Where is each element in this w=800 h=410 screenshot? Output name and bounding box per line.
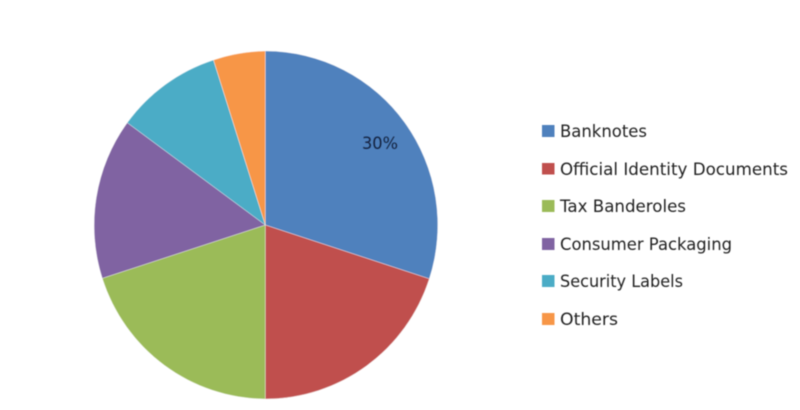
- legend item: Others: Others: [560, 310, 618, 330]
- slice: Consumer Packaging: [94, 123, 265, 278]
- legend item: Tax Banderoles: Tax Banderoles: [559, 197, 686, 217]
- legend item: Banknotes: Banknotes: [560, 122, 647, 142]
- pie chart: [94, 51, 438, 399]
- legend item: Official Identity Documents: Official Identity Documents: [560, 160, 788, 180]
- data label: 30%: 30%: [362, 134, 398, 154]
- slice: Banknotes 30%: [265, 51, 438, 279]
- legend item: Consumer Packaging: Consumer Packaging: [560, 235, 732, 255]
- slice: Official Identity Documents: [265, 225, 429, 399]
- legend: [542, 122, 788, 330]
- legend item: Security Labels: Security Labels: [560, 272, 683, 292]
- slice: Others: [214, 51, 265, 225]
- slice: Tax Banderoles: [102, 225, 265, 399]
- slice: Security Labels: [127, 60, 265, 225]
